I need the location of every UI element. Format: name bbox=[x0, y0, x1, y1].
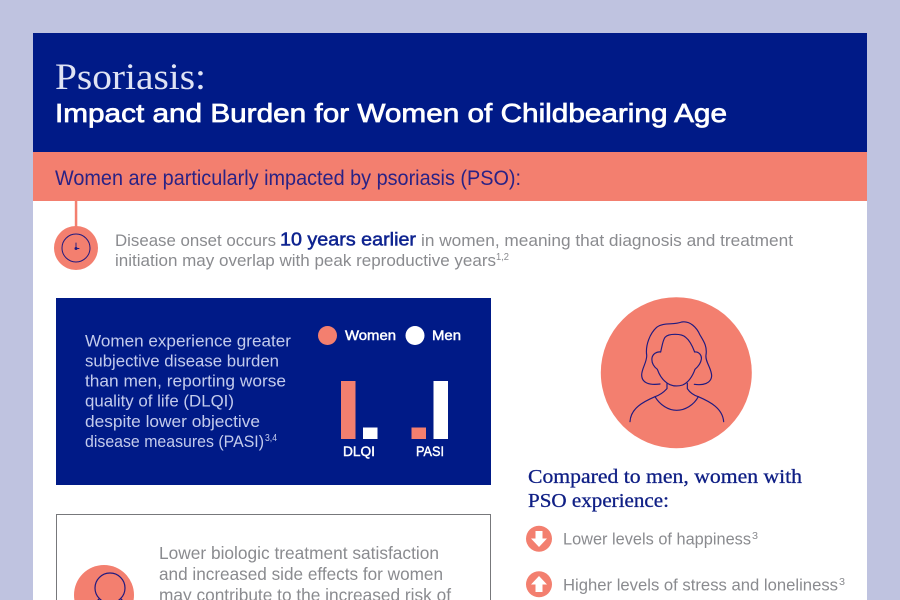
icon: clock with connector bbox=[54, 201, 98, 270]
burden text: subjective disease burden bbox=[85, 352, 279, 370]
panel: disease burden bbox=[56, 298, 491, 485]
burden text: despite lower objective bbox=[85, 412, 260, 431]
onset text block: initiation may overlap with peak reproductive years bbox=[115, 251, 496, 270]
onset text block: 10 years earlier bbox=[280, 230, 416, 250]
bar chart: DLQI bbox=[343, 443, 375, 459]
subtitle: Impact and Burden for Women of Childbearing Age bbox=[55, 98, 727, 128]
list item: lower happiness: Lower levels of happiness bbox=[563, 530, 751, 548]
burden text: quality of life (DLQI) bbox=[85, 392, 234, 410]
onset text block bbox=[115, 230, 793, 270]
treatment text bbox=[159, 543, 451, 600]
burden text: disease measures (PASI) bbox=[85, 432, 264, 451]
legend bbox=[318, 326, 461, 345]
coral section heading bar bbox=[33, 152, 867, 201]
list item: higher stress: 3 bbox=[839, 577, 845, 588]
burden text: 3,4 bbox=[265, 433, 277, 444]
title: Psoriasis: Psoriasis: bbox=[55, 57, 206, 98]
list item: lower happiness: 3 bbox=[752, 531, 758, 542]
onset text block: in women, meaning that diagnosis and treatment bbox=[421, 231, 793, 250]
icon: person bbox=[74, 565, 134, 600]
list item: higher stress bbox=[526, 571, 845, 597]
icon: up arrow bbox=[526, 571, 552, 597]
icon: woman portrait bbox=[601, 297, 752, 448]
legend: Men bbox=[432, 327, 461, 343]
heading: compared to men: Compared to men, women with bbox=[528, 466, 802, 488]
bar chart: PASI bbox=[416, 443, 444, 459]
header banner bbox=[33, 33, 867, 152]
bar chart bbox=[341, 381, 448, 459]
list item: higher stress: Higher levels of stress and loneliness bbox=[563, 576, 838, 594]
panel: treatment satisfaction bbox=[56, 514, 490, 600]
onset text block: Disease onset occurs bbox=[115, 231, 276, 250]
burden text: Women experience greater bbox=[85, 332, 291, 350]
treatment text: and increased side effects for women bbox=[159, 564, 443, 584]
heading: compared to men bbox=[528, 466, 802, 512]
heading: compared to men: PSO experience: bbox=[528, 490, 669, 512]
treatment text: Lower biologic treatment satisfaction bbox=[159, 543, 439, 563]
burden text: than men, reporting worse bbox=[85, 372, 286, 390]
burden text bbox=[85, 332, 291, 451]
icon: down arrow bbox=[526, 526, 552, 552]
coral section heading bar: Women are particularly impacted by psoriasis (PSO): bbox=[55, 167, 521, 190]
list item: lower happiness bbox=[526, 526, 758, 552]
onset text block: 1,2 bbox=[496, 252, 509, 263]
legend: Women bbox=[345, 327, 396, 343]
